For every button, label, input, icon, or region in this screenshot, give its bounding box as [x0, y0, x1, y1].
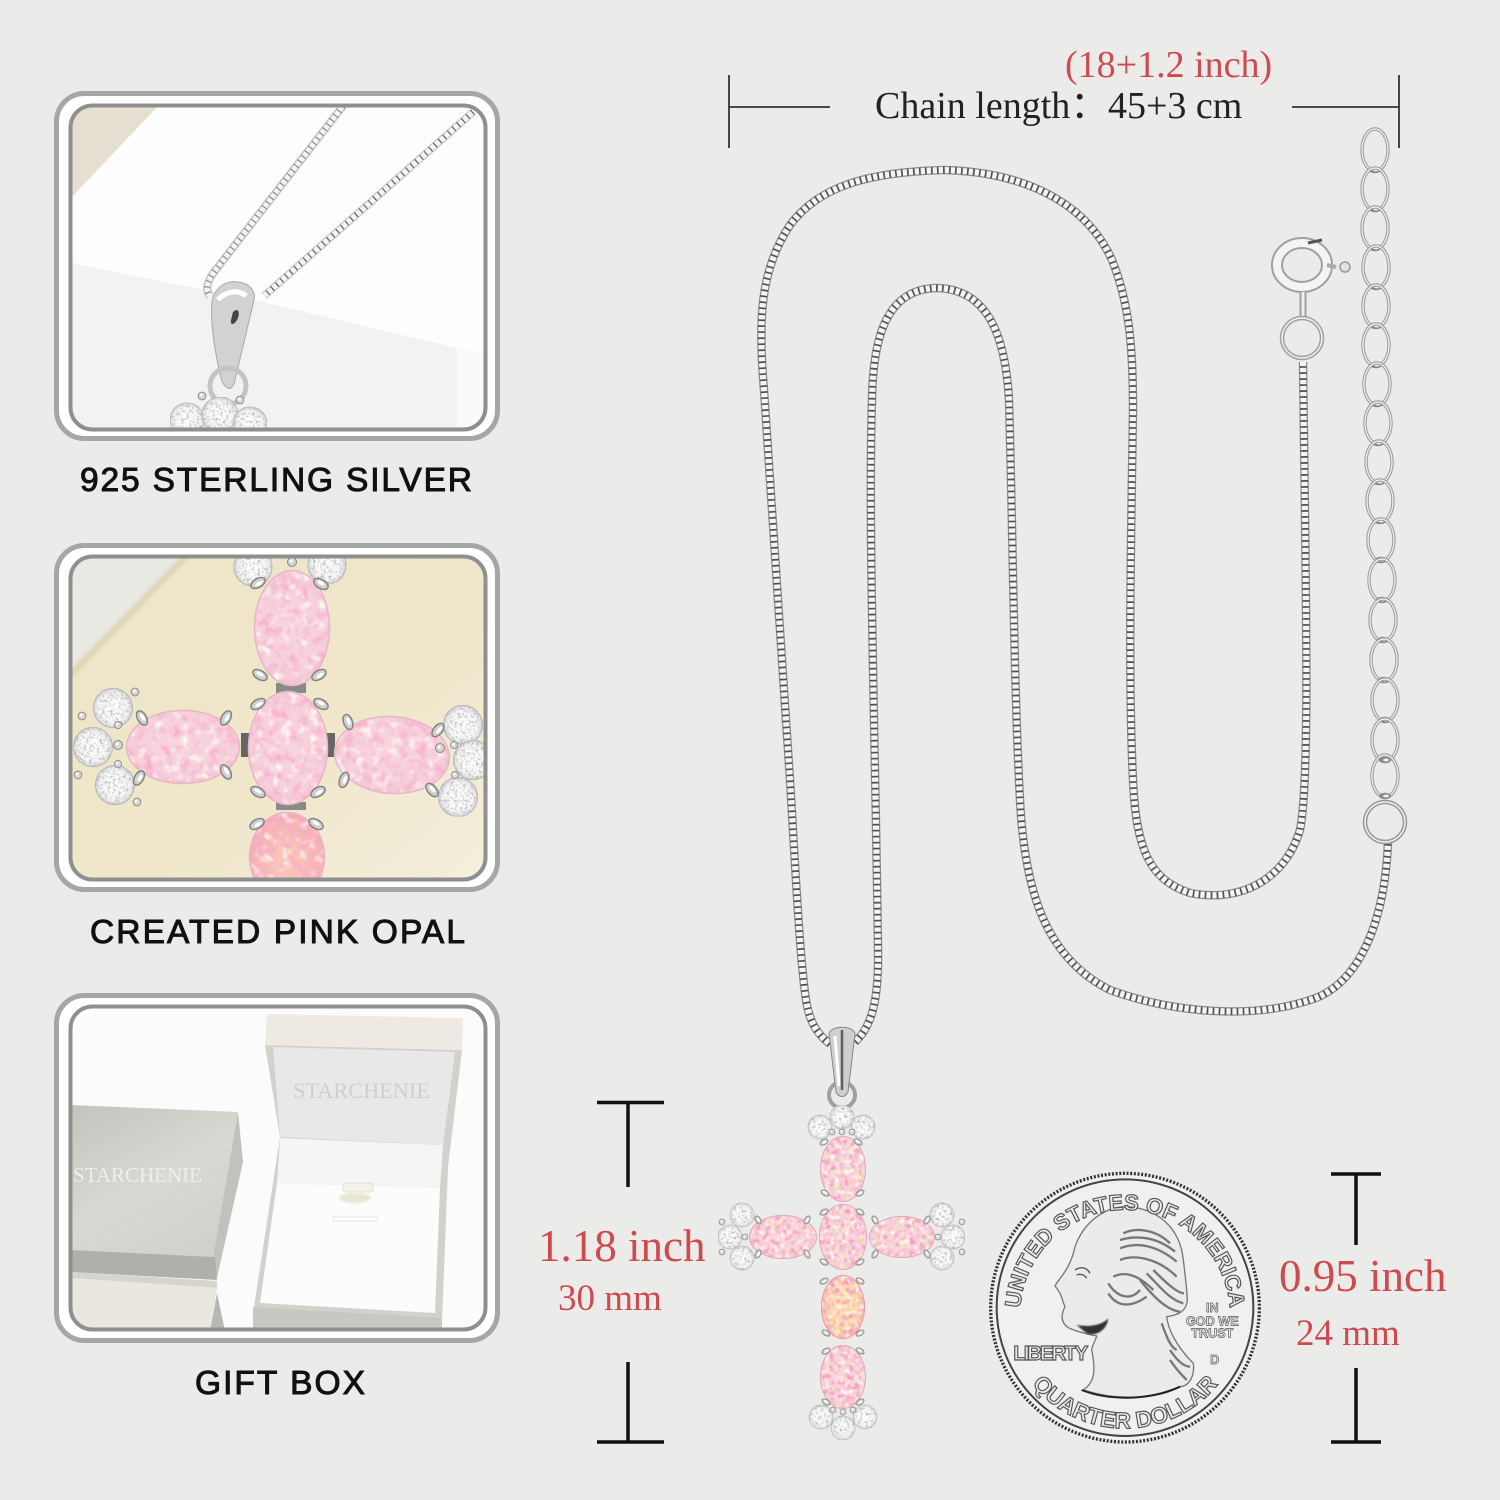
- coin height label: 24 mm: [1296, 1313, 1400, 1354]
- panel: 925 sterling silver photo: [56, 94, 498, 441]
- coin legend: Quarter Dollar: QUARTER DOLLAR: [1034, 1376, 1220, 1429]
- dimension bracket: coin height: [1331, 1174, 1381, 1442]
- open box: STARCHENIE: [293, 1078, 430, 1103]
- coin height label: 0.95 inch: [1279, 1251, 1446, 1301]
- dimension label: chain length: Chain length：: [875, 85, 1108, 127]
- panel: created pink opal photo: [56, 546, 498, 902]
- closed box lid: [71, 1105, 243, 1331]
- heading: gift box: GIFT BOX: [195, 1365, 365, 1402]
- pendant height label: 1.18 inch: [538, 1221, 705, 1271]
- pendant height label: [538, 1221, 705, 1319]
- extender chain: [1362, 129, 1405, 842]
- dimension label: chain length: 45+3 cm: [1108, 85, 1242, 127]
- dimension label: inches: (18+1.2 inch): [1065, 44, 1272, 86]
- coin height label: [1279, 1251, 1446, 1354]
- coin portrait: [1055, 1207, 1194, 1398]
- coin legend: Liberty: LIBERTY: [1013, 1342, 1089, 1365]
- pendant: pink opal cross: [718, 1027, 965, 1440]
- coin motto: IN: [1206, 1301, 1219, 1315]
- coin legend: United States of America: UNITED STATES OF AMERICA: [1004, 1194, 1245, 1308]
- closed box lid: STARCHENIE: [73, 1163, 202, 1187]
- quarter coin for scale: [989, 1172, 1261, 1444]
- dimension bracket: chain length: [729, 75, 1399, 148]
- coin motto: [1186, 1301, 1239, 1367]
- open box: [253, 1014, 463, 1331]
- coin motto: GOD WE: [1186, 1315, 1239, 1329]
- heading: 925 sterling silver: 925 STERLING SILVER: [80, 462, 472, 499]
- spring clasp: [1277, 240, 1350, 358]
- coin motto: D: [1210, 1353, 1219, 1367]
- pendant height label: 30 mm: [558, 1278, 662, 1319]
- dimension bracket: pendant height: [597, 1102, 664, 1442]
- necklace chain: [761, 170, 1388, 1044]
- coin motto: TRUST: [1191, 1327, 1234, 1341]
- panel: gift box photo: [56, 996, 498, 1340]
- heading: created pink opal: CREATED PINK OPAL: [90, 914, 465, 951]
